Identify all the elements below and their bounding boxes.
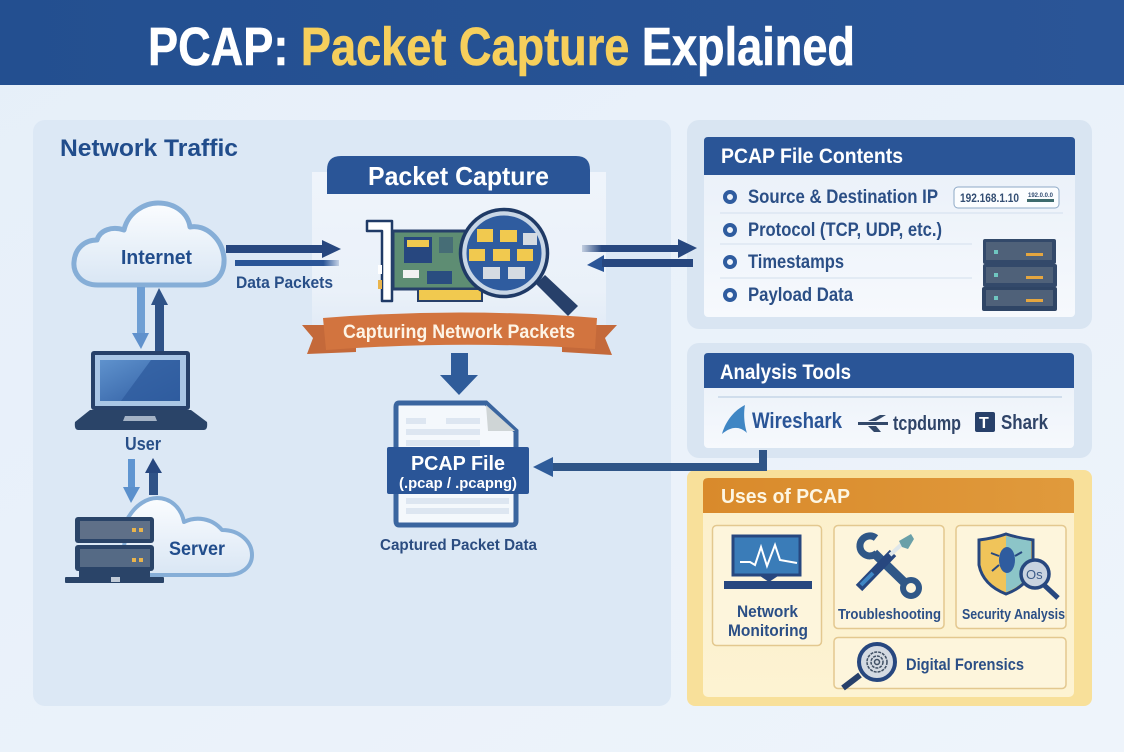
label: data packets: Data Packets xyxy=(236,273,333,292)
arrow: capture to contents xyxy=(582,239,697,258)
panel: packet capture xyxy=(312,156,606,342)
panel: analysis tools xyxy=(687,343,1092,458)
arrow: internet to laptop xyxy=(132,287,149,349)
arrow: laptop to internet xyxy=(151,288,168,351)
heading: network traffic: Network Traffic xyxy=(60,135,238,162)
item: payload data: Payload Data xyxy=(748,285,853,306)
arrow: user to server xyxy=(123,459,140,503)
card: digital forensics: Digital Forensics xyxy=(906,655,1024,674)
card: security analysis: Security Analysis xyxy=(962,606,1065,623)
card: network monitoring: Network xyxy=(737,603,799,621)
card: digital forensics xyxy=(834,638,1066,688)
title banner xyxy=(0,0,1124,85)
panel: uses of pcap xyxy=(687,470,1092,706)
label: user: User xyxy=(125,434,161,454)
card: security analysis: Os xyxy=(1026,567,1043,582)
heading: analysis tools: Analysis Tools xyxy=(720,361,851,384)
ribbon: capturing network packets: Capturing Network Packets xyxy=(343,322,575,343)
icon: pcap file: PCAP File xyxy=(411,453,505,475)
icon: magnifying glass xyxy=(460,210,578,316)
tool: wireshark: Wireshark xyxy=(752,408,843,433)
card: network monitoring xyxy=(712,526,822,646)
label: captured packet data: Captured Packet Data xyxy=(380,537,537,554)
heading: pcap file contents: PCAP File Contents xyxy=(721,145,903,168)
item: protocol: Protocol (TCP, UDP, etc.) xyxy=(748,220,942,241)
ip address badge: 192.168.1.10 xyxy=(960,193,1019,205)
tool: tshark: Shark xyxy=(1001,412,1049,434)
item: timestamps: Timestamps xyxy=(748,252,844,273)
icon: pcap file xyxy=(387,403,529,525)
card: troubleshooting: Troubleshooting xyxy=(838,606,941,623)
ribbon: capturing network packets xyxy=(302,312,617,355)
icon: network card xyxy=(367,221,482,301)
tool: tcpdump xyxy=(858,413,961,435)
card: network monitoring: Monitoring xyxy=(728,622,808,640)
icon: server cloud xyxy=(120,498,252,575)
tool: wireshark xyxy=(722,405,843,434)
card: security analysis xyxy=(956,526,1066,628)
card: troubleshooting xyxy=(834,526,944,628)
icon: internet cloud xyxy=(74,203,224,285)
tool: tshark xyxy=(975,412,1049,434)
arrow: server to user xyxy=(145,458,162,495)
icon: server rack xyxy=(65,517,164,583)
arrow: internet to capture xyxy=(226,240,341,266)
icon: pcap file: (.pcap / .pcapng) xyxy=(399,475,517,492)
icon: laptop xyxy=(75,351,207,430)
heading: uses of pcap: Uses of PCAP xyxy=(721,486,850,508)
arrow: contents to capture xyxy=(587,255,693,272)
item: source and destination ip: Source & Destination IP xyxy=(748,187,938,208)
arrow: analysis tools to pcap file xyxy=(533,450,763,477)
label: server: Server xyxy=(169,539,226,560)
panel: pcap file contents xyxy=(687,120,1092,329)
tool: tcpdump: tcpdump xyxy=(893,413,961,435)
ip address badge xyxy=(954,187,1059,208)
tool: tshark: T xyxy=(979,415,989,432)
arrow: capture to file xyxy=(440,353,478,395)
title: PCAP: Packet Capture Explained xyxy=(148,17,855,77)
icon: internet cloud: Internet xyxy=(121,247,192,269)
icon: server stack xyxy=(982,239,1057,311)
heading: packet capture: Packet Capture xyxy=(368,161,549,191)
ip address badge: 192.0.0.0 xyxy=(1028,193,1054,199)
